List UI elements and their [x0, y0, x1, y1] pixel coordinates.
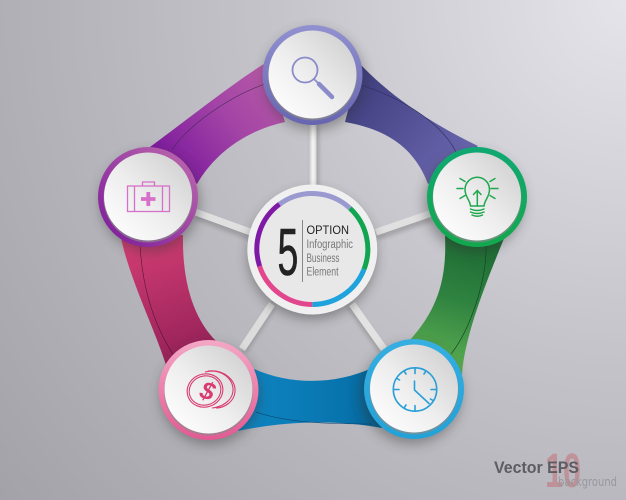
label: element: Element: [306, 266, 339, 278]
label: infographic: Infographic: [306, 239, 353, 251]
icon: magnifier: [292, 58, 332, 97]
watermark: [494, 445, 617, 498]
watermark: 10: [545, 445, 581, 498]
ribbon: blue: [238, 368, 382, 431]
big number 5: 5: [278, 215, 298, 290]
node: clock: [362, 339, 464, 444]
divider: [302, 220, 303, 282]
watermark: Vector EPS: [494, 458, 579, 477]
center hub: [247, 184, 377, 319]
spokes: [194, 125, 433, 354]
node: lightbulb: [424, 147, 527, 252]
node: search: [262, 25, 364, 130]
icon: lightbulb: [457, 177, 498, 216]
ribbon: indigo: [345, 64, 478, 184]
ribbon: purple: [150, 62, 285, 184]
ring segments: [257, 194, 368, 305]
node: first aid case: [98, 147, 200, 252]
label: option: OPTION: [306, 223, 349, 237]
icon: first aid case: [128, 182, 170, 212]
node: coins: [158, 340, 260, 445]
ribbon: pink: [121, 235, 216, 365]
icon: clock: [393, 368, 437, 411]
ribbon: green: [410, 236, 505, 374]
label: business: Business: [306, 253, 340, 265]
icon: coins: $: [196, 376, 219, 407]
